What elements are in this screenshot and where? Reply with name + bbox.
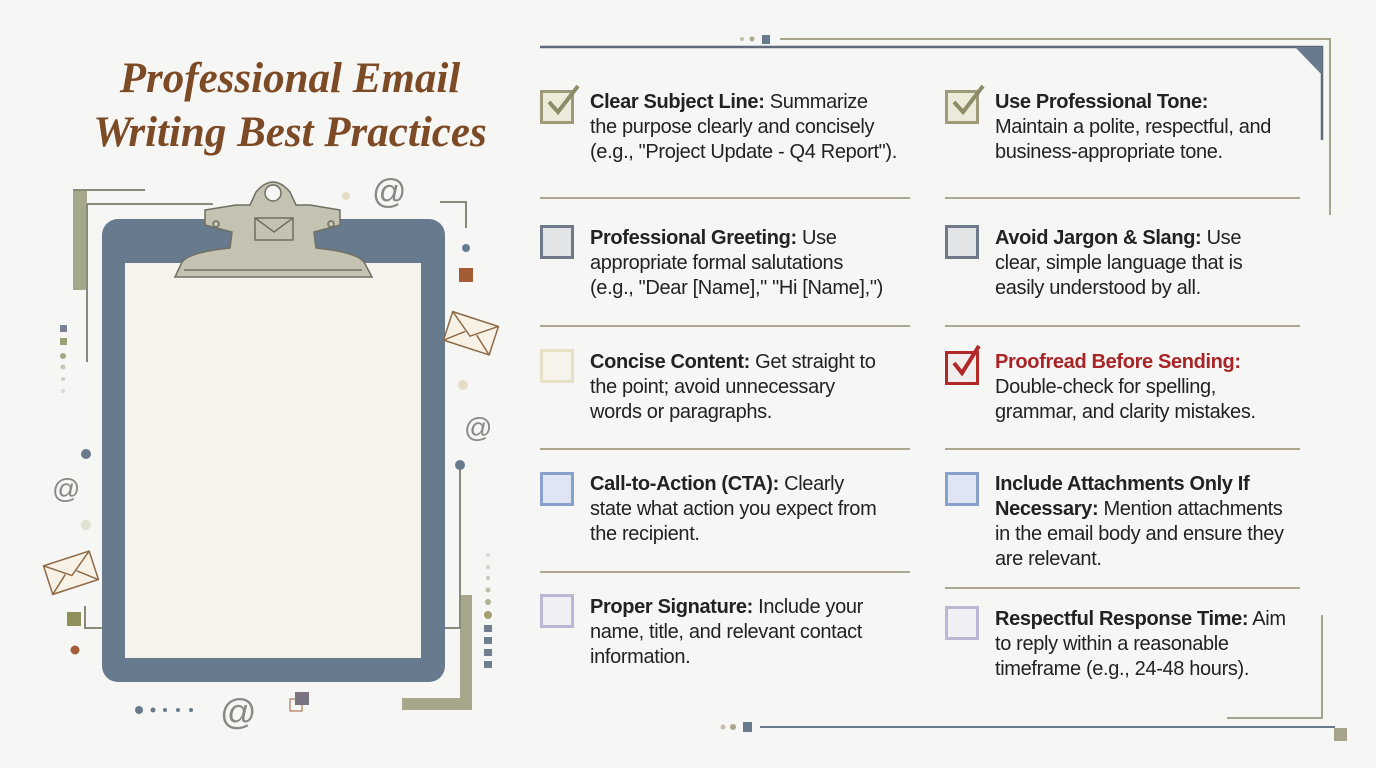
title: Professional Email	[120, 55, 460, 102]
item: Concise Content: the point; avoid unnecessary	[590, 376, 835, 398]
item: CTA: the recipient.	[590, 523, 700, 545]
item: Response Time: timeframe (e.g., 24-48 hours).	[995, 658, 1249, 680]
item: Professional Greeting: appropriate formal salutations	[590, 252, 843, 274]
item: Response Time: Respectful Response Time: Aim	[995, 608, 1286, 630]
item: Use Professional Tone: business-appropriate tone.	[995, 141, 1223, 163]
item: Proofread: Double-check for spelling,	[995, 376, 1216, 398]
item: Proofread: grammar, and clarity mistakes.	[995, 401, 1256, 423]
item: Avoid Jargon: Avoid Jargon & Slang: Use	[995, 227, 1241, 249]
item: Use Professional Tone: Maintain a polite, respectful, and	[995, 116, 1271, 138]
item: Signature: information.	[590, 646, 690, 668]
separators	[540, 197, 910, 199]
item: CTA: Call-to-Action (CTA): Clearly	[590, 473, 844, 495]
item: Professional Greeting: (e.g., "Dear [Name]," "Hi [Name],")	[590, 277, 883, 299]
item: Avoid Jargon: easily understood by all.	[995, 277, 1201, 299]
icon: box lavender	[540, 594, 574, 628]
illustration: clipboard: @	[52, 473, 80, 504]
item: Use Professional Tone: Use Professional Tone:	[995, 91, 1208, 113]
icon: checked box olive	[945, 90, 979, 124]
illustration: clipboard	[42, 173, 500, 732]
item: Attachments: are relevant.	[995, 548, 1102, 570]
frame decoration	[540, 35, 1347, 741]
illustration: clipboard: @	[464, 412, 492, 443]
item: Clear Subject Line: (e.g., "Project Update - Q4 Report").	[590, 141, 897, 163]
item: Use Professional Tone	[945, 84, 1271, 163]
item: Attachments: in the email body and ensure they	[995, 523, 1284, 545]
icon: box gray	[945, 225, 979, 259]
item: Signature: Proper Signature: Include your	[590, 596, 863, 618]
item: Concise Content: Concise Content: Get straight to	[590, 351, 876, 373]
item: Signature	[540, 594, 863, 668]
item: Attachments: Include Attachments Only If	[995, 473, 1249, 495]
icon: box blue	[540, 472, 574, 506]
item: Signature: name, title, and relevant contact	[590, 621, 862, 643]
item: Avoid Jargon: clear, simple language that is	[995, 252, 1242, 274]
item: Clear Subject Line: Clear Subject Line: Summarize	[590, 91, 868, 113]
title: Writing Best Practices	[93, 109, 487, 156]
item: Proofread	[945, 344, 1256, 423]
item: Clear Subject Line: the purpose clearly and concisely	[590, 116, 874, 138]
icon: red check box	[945, 351, 979, 385]
item: CTA: state what action you expect from	[590, 498, 876, 520]
title	[93, 55, 487, 156]
item: Concise Content: words or paragraphs.	[590, 401, 772, 423]
icon: checked box olive	[540, 90, 574, 124]
item: CTA	[540, 472, 876, 545]
item: Clear Subject Line	[540, 84, 897, 163]
illustration: clipboard: @	[220, 691, 257, 732]
item: Attachments	[945, 472, 1284, 570]
illustration: clipboard: @	[372, 173, 407, 211]
item: Proofread: Proofread Before Sending:	[995, 351, 1241, 373]
icon: box blue	[945, 472, 979, 506]
icon: box gray	[540, 225, 574, 259]
item: Avoid Jargon	[945, 225, 1242, 299]
item: Attachments: Necessary: Mention attachments	[995, 498, 1282, 520]
icon: box lavender	[945, 606, 979, 640]
item: Professional Greeting	[540, 225, 883, 299]
item: Concise Content	[540, 349, 876, 423]
item: Response Time: to reply within a reasonable	[995, 633, 1229, 655]
icon: box cream	[540, 349, 574, 383]
item: Response Time	[945, 606, 1286, 680]
item: Professional Greeting: Professional Greeting: Use	[590, 227, 837, 249]
